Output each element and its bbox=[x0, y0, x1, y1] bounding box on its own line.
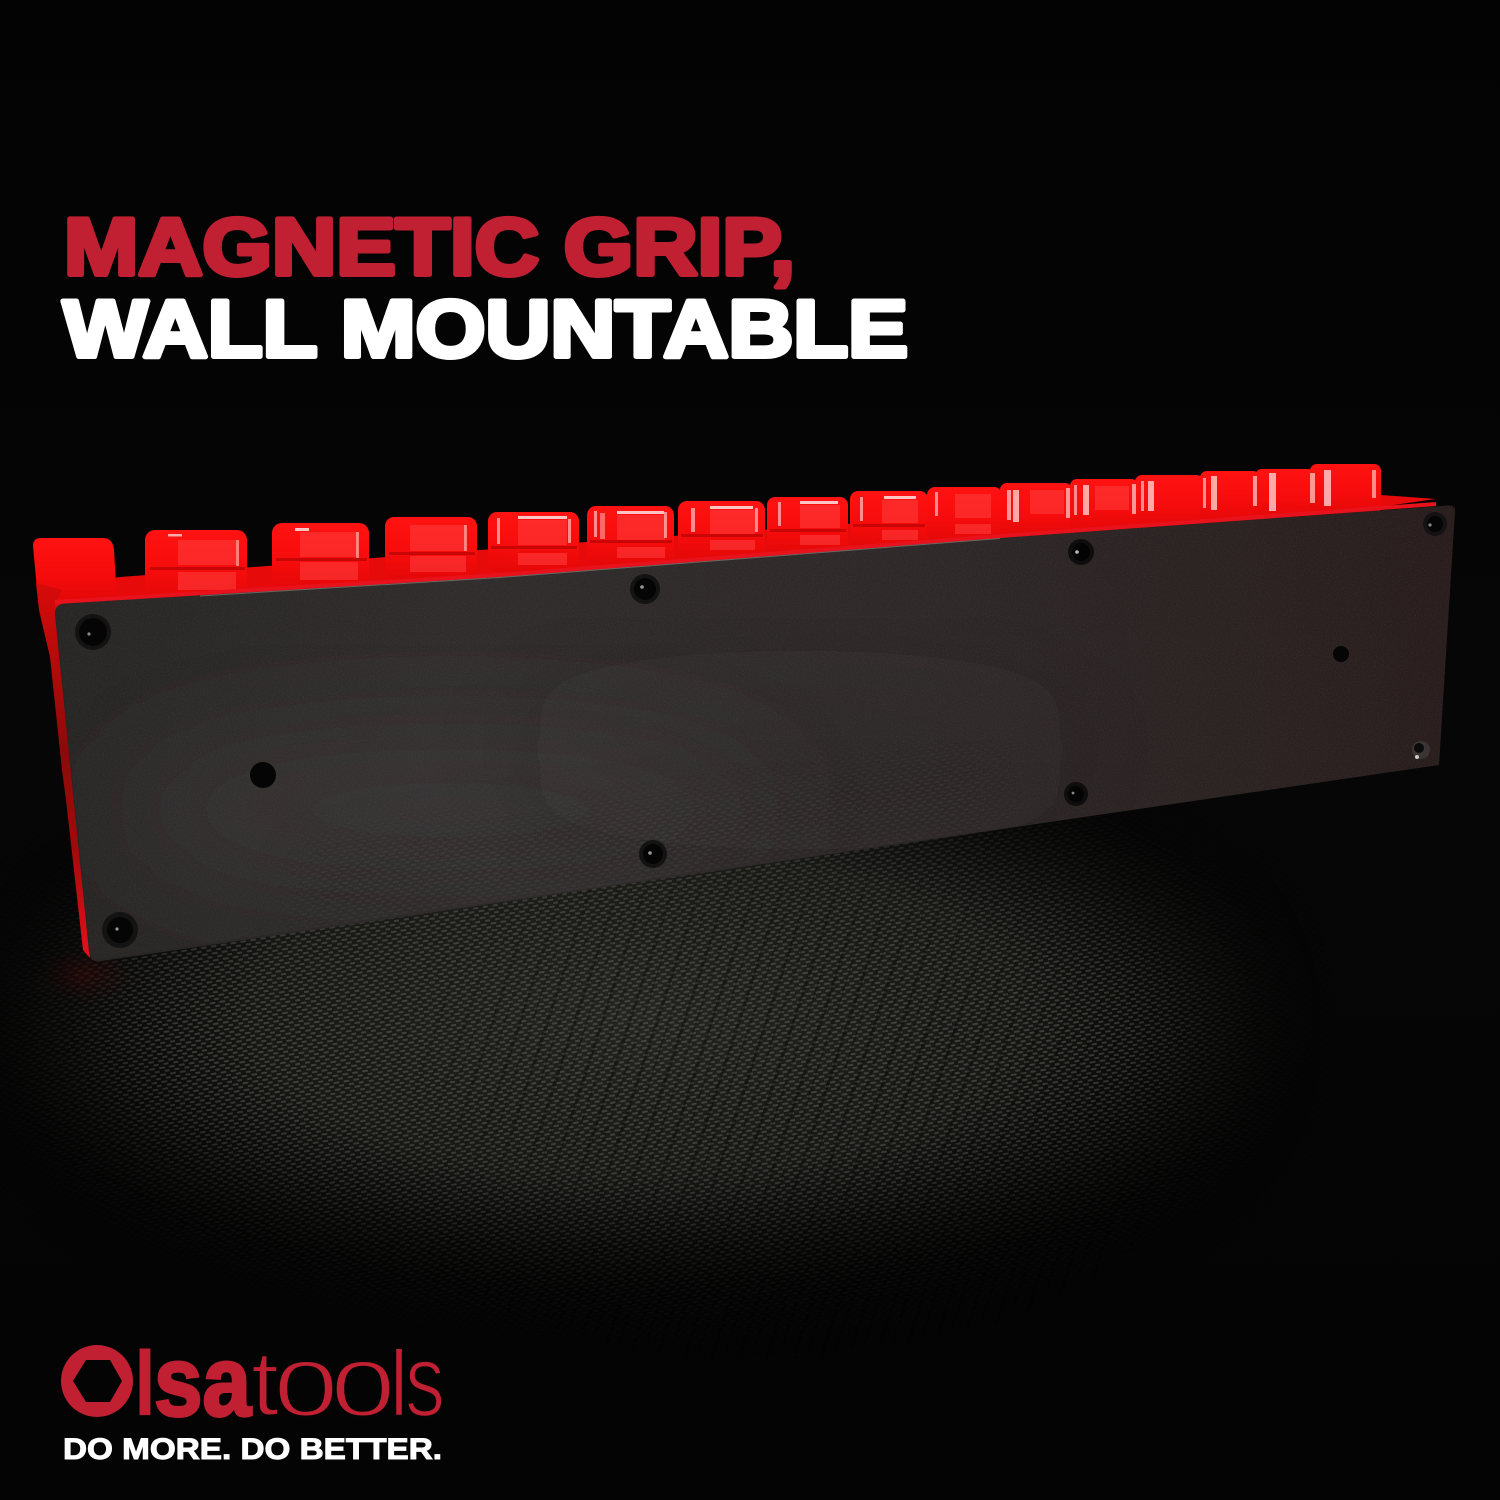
plate screws bbox=[75, 512, 1447, 948]
plate top edge rim bbox=[55, 504, 1436, 602]
screw bottom centre bbox=[639, 840, 667, 868]
mounting hole left bbox=[250, 762, 276, 788]
logo wordmark light second o: o bbox=[330, 1323, 396, 1438]
screw bottom right bbox=[1412, 741, 1430, 759]
logo wordmark light s: s bbox=[405, 1323, 445, 1438]
screw top centre bbox=[630, 574, 660, 604]
screw bottom right centre bbox=[1064, 782, 1088, 806]
screw top right bbox=[1423, 512, 1447, 536]
tab highlights bbox=[168, 470, 1376, 566]
black mounting plate bbox=[40, 500, 1460, 970]
screw bottom left bbox=[102, 912, 138, 948]
red side wall bbox=[36, 583, 90, 958]
logo: Olsatools bbox=[61, 1323, 445, 1466]
tab face shading bbox=[178, 486, 1129, 590]
title line: magnetic grip: MAGNETIC GRIP, bbox=[64, 202, 795, 292]
logo wordmark bold l: l bbox=[134, 1333, 156, 1435]
product: red magnetic socket holder, rear view bbox=[33, 464, 1460, 970]
mounting hole right bbox=[1333, 646, 1349, 662]
title line: wall mountable: WALL MOUNTABLE bbox=[63, 284, 908, 374]
red socket tabs bbox=[33, 464, 1381, 600]
logo wordmark bold sa: sa bbox=[154, 1326, 252, 1436]
title bbox=[63, 202, 908, 374]
tab row bbox=[33, 464, 1381, 600]
screw top right centre bbox=[1068, 539, 1094, 565]
logo wordmark light first o: o bbox=[273, 1323, 339, 1438]
red base strip behind plate bbox=[40, 492, 1436, 630]
logo icon: hex socket O bbox=[61, 1345, 133, 1417]
infographic canvas bbox=[22, 216, 1455, 1460]
logo wordmark light l: l bbox=[391, 1333, 407, 1435]
tagline: DO MORE. DO BETTER. bbox=[63, 1433, 442, 1466]
logo wordmark light t: t bbox=[251, 1333, 279, 1435]
screw top left bbox=[75, 614, 111, 650]
plate top edge highlight bbox=[200, 538, 1000, 596]
carbon fibre floor bbox=[28, 825, 1252, 1288]
tab grooves bbox=[150, 524, 925, 570]
